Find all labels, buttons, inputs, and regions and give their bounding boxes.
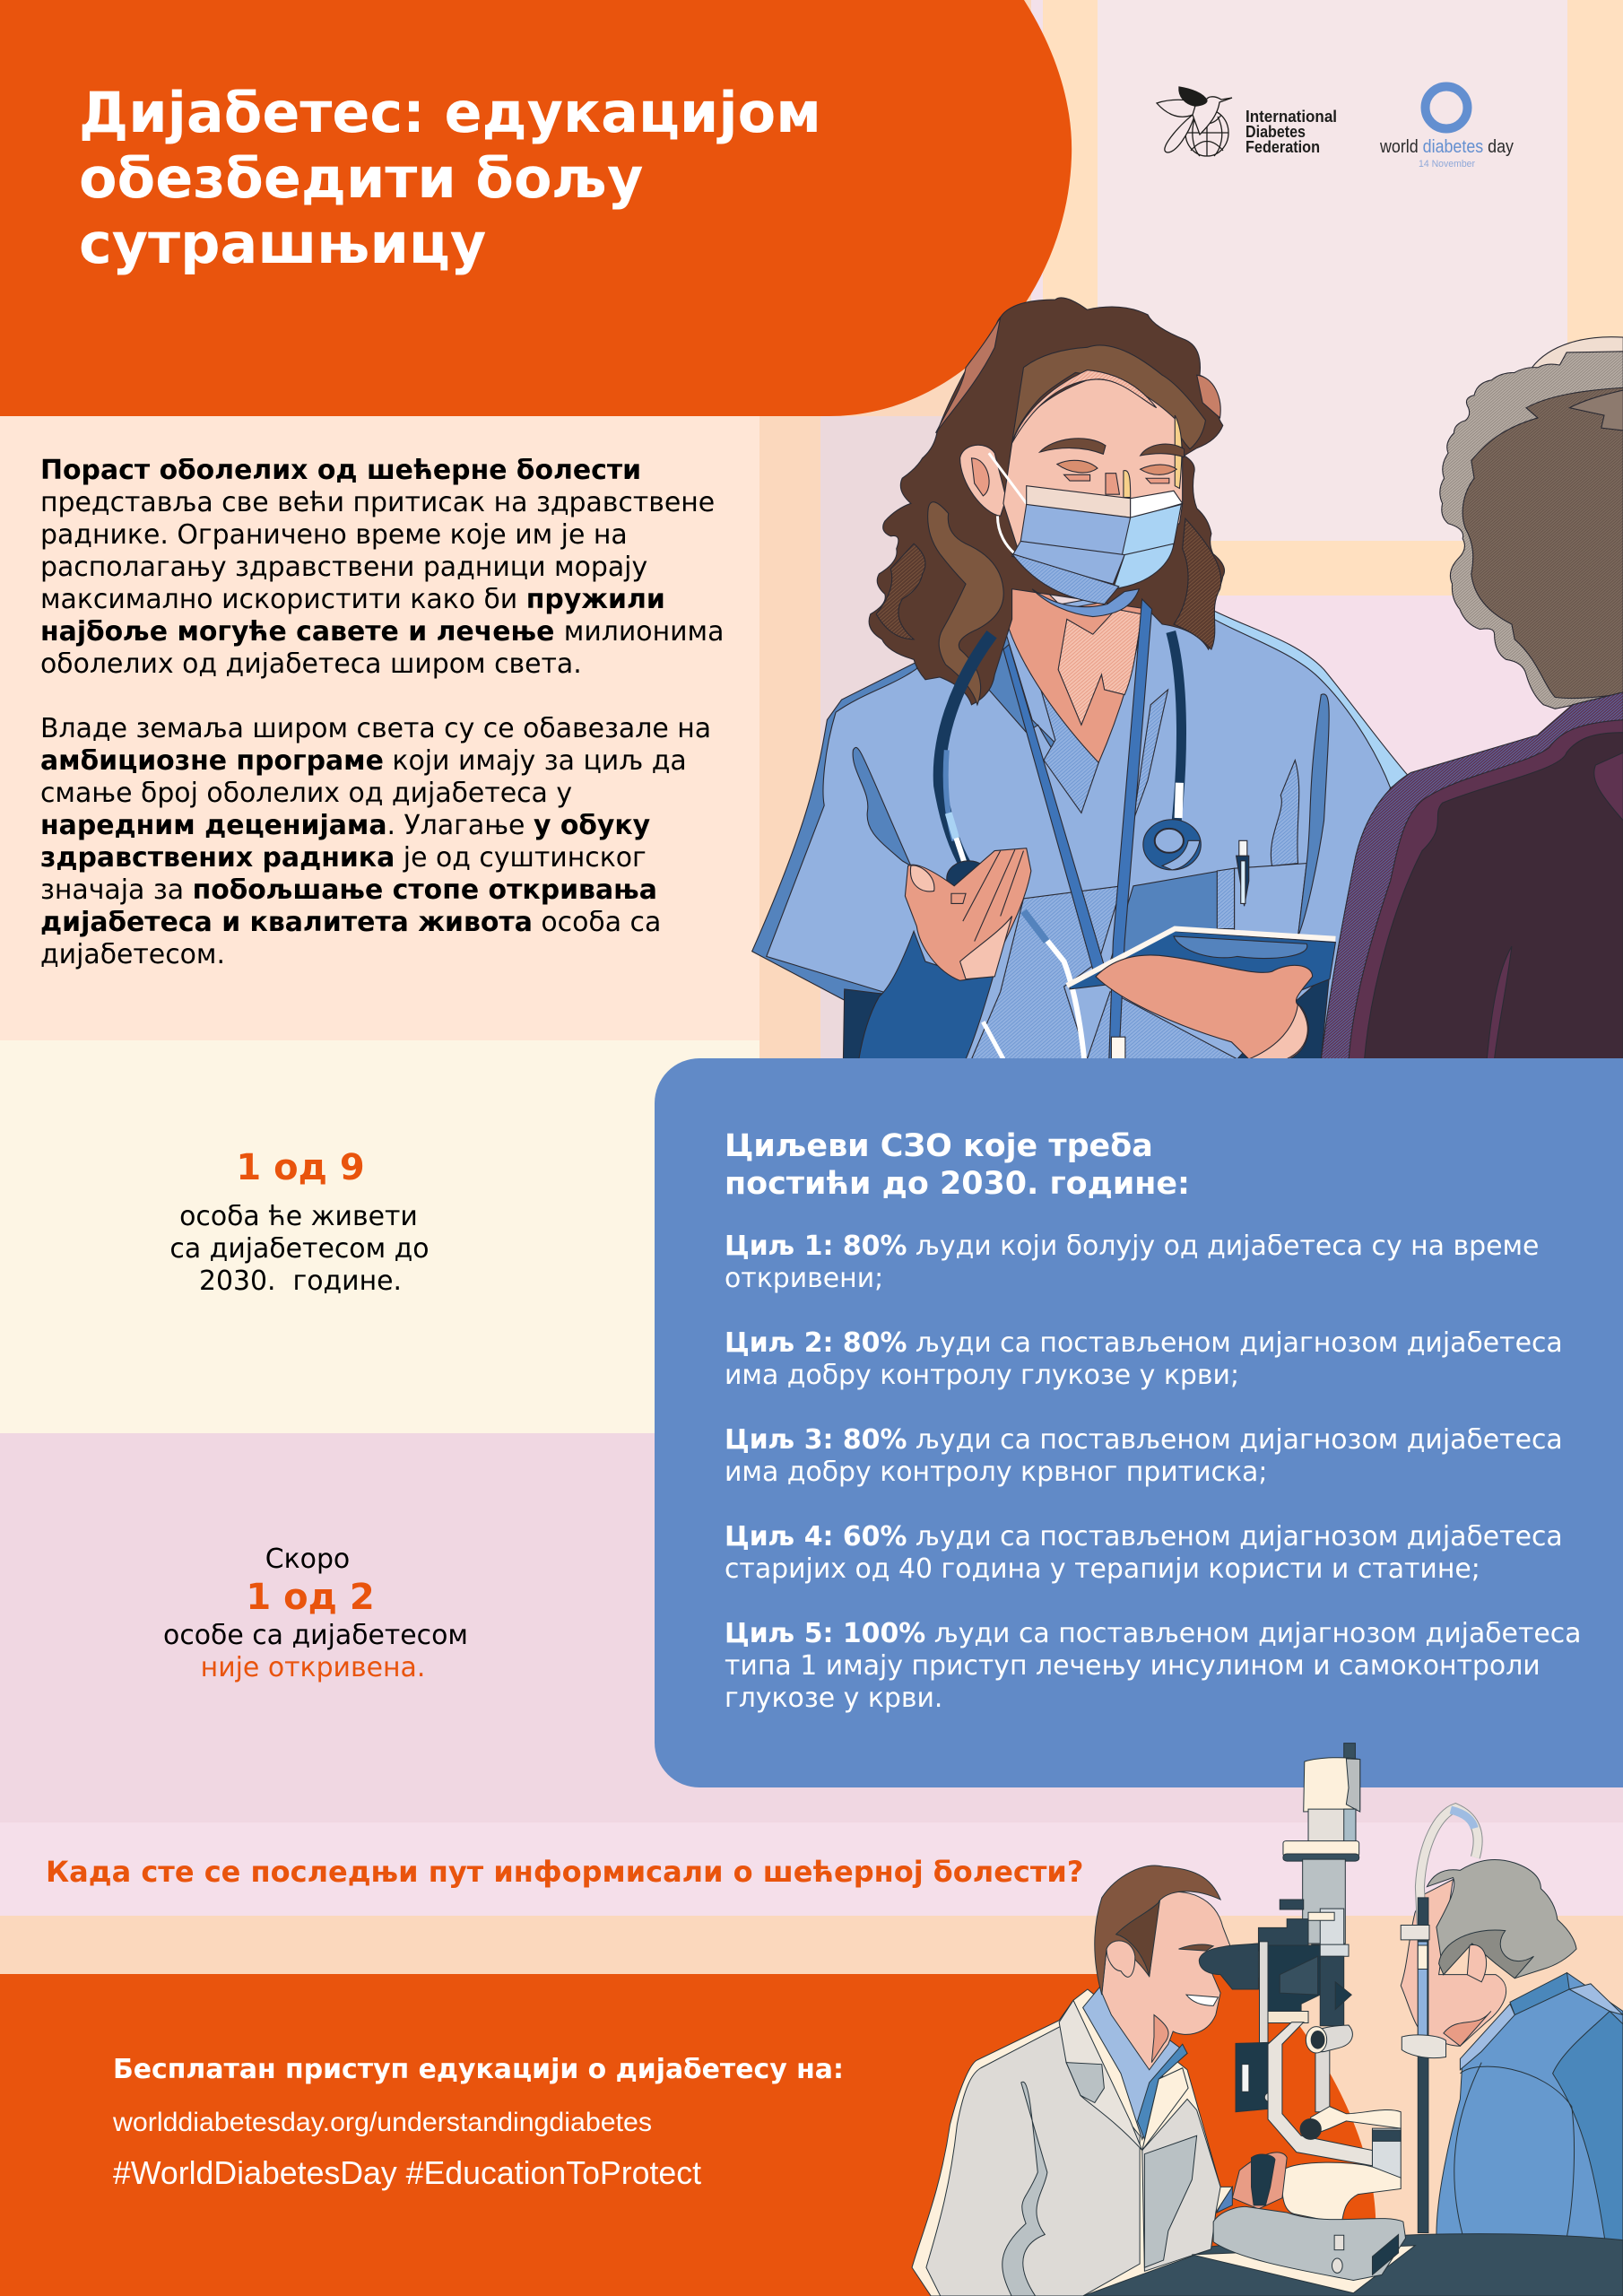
table — [1083, 2234, 1623, 2296]
doctor hair shade — [1116, 1901, 1159, 1977]
right hand light — [1249, 1004, 1307, 1059]
lamp body — [1268, 1945, 1320, 2011]
headrest pole — [1418, 1898, 1428, 2232]
neck shadow hatch — [1058, 609, 1142, 725]
box window — [1242, 2065, 1249, 2092]
base lug — [1332, 2258, 1342, 2273]
logo wordmark: Federation — [1245, 138, 1320, 156]
goal 5: типа 1 имају приступ лечењу инсулином и самоконтроли — [725, 1650, 1541, 1682]
base dark facet — [1372, 2234, 1399, 2274]
coat lapel shade — [1066, 2063, 1104, 2103]
jacket seam — [1454, 2063, 1575, 2237]
stat description: особа ће живети — [179, 1201, 418, 1232]
box stripe — [1372, 2130, 1401, 2141]
dark tab — [1280, 1900, 1304, 1909]
illustration: eye examination — [912, 1744, 1623, 2296]
doctor head — [1102, 1892, 1230, 2070]
pocket crease — [1298, 694, 1329, 936]
footer hashtags: #WorldDiabetesDay #EducationToProtect — [113, 2154, 701, 2191]
title: обезбедити бољу — [79, 145, 643, 211]
intro text: дијабетесом. — [40, 939, 225, 970]
hair copper edge right — [1197, 375, 1220, 418]
nose highlight — [1124, 471, 1131, 498]
inner ear — [971, 458, 989, 496]
tablet edge — [1067, 929, 1335, 986]
patient neck shadow — [1444, 2011, 1491, 2046]
right bracket — [1311, 2107, 1401, 2135]
WHO goals list — [725, 1231, 1582, 1714]
nurse left sleeve shade — [752, 662, 920, 1002]
nurse ear — [960, 445, 1006, 516]
intro text: здравствених радника је од суштинског — [40, 842, 647, 874]
intro text: представља све већи притисак на здравствене — [40, 487, 715, 518]
stat description: са дијабетесом до — [169, 1233, 430, 1265]
patient coat outer — [1321, 692, 1623, 1059]
hair hatch left lock — [876, 544, 925, 639]
hair hatch right — [1174, 518, 1221, 649]
nose — [1106, 474, 1119, 494]
cuff — [1217, 2187, 1232, 2213]
nurse lower hatched panel — [971, 886, 1122, 1059]
panel: WHO goals — [655, 1058, 1623, 1787]
jacket collar — [1510, 1973, 1569, 2015]
patient coat crease — [1487, 752, 1623, 1059]
left hand light — [910, 865, 1012, 979]
hair highlight left lock — [928, 502, 1003, 705]
carriage — [1282, 2162, 1401, 2223]
goal 1: Циљ 1: 80% људи који болују од дијабетеса су на време — [725, 1231, 1539, 1262]
title: Дијабетес: едукацијом — [79, 80, 821, 145]
logo: world diabetes day — [1379, 86, 1514, 170]
doctor right panel — [1142, 2099, 1220, 2271]
nurse face — [1003, 379, 1183, 549]
nurse right sleeve dark — [1237, 971, 1330, 1059]
goal 5: Циљ 5: 100% људи са постављеном дијагнозом дијабетеса — [725, 1618, 1582, 1649]
lamp column — [1303, 1859, 1345, 1944]
nurse forearm navy — [843, 989, 885, 1059]
goal 3: има добру контролу крвног притиска; — [725, 1457, 1267, 1488]
eyepiece — [1199, 1944, 1258, 1989]
patient coat dark — [1365, 733, 1623, 1059]
intro text: располагању здравствени радници морају — [40, 552, 647, 583]
doctor coat body — [926, 2026, 1140, 2296]
coat shade — [1002, 2082, 1047, 2296]
panel: WHO goals heading: Циљеви СЗО које треба — [725, 1128, 1153, 1164]
panel: question band — [0, 1822, 1623, 1916]
lamp neck — [1308, 1809, 1356, 1843]
statistic: almost 1 in 2 — [163, 1544, 468, 1683]
patient ear — [1467, 1945, 1487, 1982]
back hair — [869, 298, 1225, 705]
coat lapel — [1059, 2000, 1142, 2151]
intro text: Владе земаља широм света су се обавезале на — [40, 713, 711, 744]
stat highlight: није откривена. — [201, 1652, 425, 1683]
stethoscope — [940, 631, 1201, 1059]
panel: WHO goals heading: постићи до 2030. године: — [725, 1166, 1190, 1202]
plate — [1192, 2246, 1415, 2293]
patient hair shade — [1439, 1930, 1533, 1979]
goal 4: Циљ 4: 60% људи са постављеном дијагнозом дијабетеса — [725, 1521, 1563, 1552]
face edge highlight — [1175, 415, 1182, 488]
headrest arc fill — [1419, 1808, 1478, 1942]
band above question — [681, 1776, 1623, 1822]
intro text: максимално искористити како би пружили — [40, 584, 665, 615]
nurse sleeve fold — [853, 747, 911, 865]
lower knob — [1300, 2118, 1321, 2139]
joystick — [1252, 2154, 1275, 2205]
right box — [1372, 2128, 1401, 2178]
lanyard — [1003, 599, 1152, 1059]
chin rest — [1402, 2035, 1446, 2058]
vertical rod — [1315, 2049, 1330, 2112]
doctor hand — [1232, 2152, 1287, 2209]
peach band — [0, 1916, 1623, 1974]
title: сутрашњицу — [79, 211, 486, 276]
black box — [1236, 2042, 1275, 2112]
coat cream lapel — [1142, 2068, 1188, 2151]
ear loop — [989, 453, 1027, 553]
right arm — [1320, 1956, 1344, 2026]
panel shade — [1144, 2135, 1197, 2267]
cream bracket — [1268, 2011, 1308, 2023]
eyes — [1057, 460, 1176, 474]
nurse neck — [1009, 553, 1148, 762]
goal 1: откривени; — [725, 1263, 883, 1294]
intro text: оболелих од дијабетеса широм света. — [40, 648, 582, 680]
logo: International Diabetes Federation — [1157, 87, 1341, 156]
intro text: смање број оболелих од дијабетеса у — [40, 778, 572, 809]
left hand fingers — [951, 849, 1023, 942]
nurse collar hatch right — [1133, 690, 1168, 821]
lamp top tip — [1344, 1744, 1355, 1759]
tablet — [1070, 931, 1335, 1002]
forehead clamp — [1401, 1926, 1429, 1940]
shirt placket — [1137, 2044, 1187, 2139]
intro text: значаја за побољшање стопе откривања — [40, 874, 657, 906]
goal 4: старијих од 40 година у терапији користи и статине; — [725, 1553, 1480, 1585]
nurse right hand — [1096, 955, 1313, 1059]
logo wordmark: International — [1245, 108, 1337, 126]
patient hair — [1427, 1860, 1576, 1979]
headrest blue strap — [1451, 1810, 1474, 1828]
goal 5: глукозе у крви. — [725, 1683, 942, 1714]
hair highlight top — [1012, 345, 1205, 449]
intro text: дијабетеса и квалитета живота особа са — [40, 907, 661, 938]
arm block — [1308, 1912, 1334, 1920]
nurse shoulder highlight — [1205, 606, 1408, 790]
forehead hatch — [1012, 370, 1157, 443]
logo date: 14 November — [1419, 159, 1475, 170]
goal 2: има добру контролу глукозе у крви; — [725, 1360, 1239, 1391]
wheel centre — [1311, 2031, 1324, 2048]
doctor brow — [1179, 1944, 1213, 1951]
intro text: Пораст оболелих од шећерне болести — [40, 455, 641, 486]
logo wordmark: world diabetes day: world diabetes day — [1379, 137, 1514, 157]
goal 2: Циљ 2: 80% људи са постављеном дијагнозом дијабетеса — [725, 1327, 1563, 1359]
neck shade — [1344, 1809, 1356, 1843]
dark steps — [1258, 1919, 1308, 1951]
doctor hair — [1095, 1866, 1220, 1995]
base knob — [1334, 2235, 1344, 2250]
curved arm — [1268, 2022, 1372, 2166]
box knob — [1264, 2092, 1278, 2102]
footer text — [112, 2054, 844, 2191]
lamp upper housing — [1304, 1758, 1360, 1812]
doctor neck shade — [1151, 2015, 1168, 2063]
footer url: worlddiabetesday.org/understandingdiabetes — [112, 2108, 652, 2137]
nurse scrubs — [767, 589, 1391, 1059]
jacket dark patch — [1553, 2011, 1623, 2242]
stat lead-in: Скоро — [265, 1544, 350, 1575]
doctor coat — [912, 1989, 1232, 2296]
intro text: амбициозне програме који имају за циљ да — [40, 745, 687, 777]
column light — [1320, 1909, 1344, 1945]
nurse left hand — [905, 848, 1031, 980]
housing shade — [1346, 1759, 1360, 1812]
shirt fold — [1271, 761, 1299, 865]
icon: blue circle — [1426, 86, 1467, 129]
wheel — [1306, 2025, 1352, 2052]
eyebrows — [1040, 439, 1185, 457]
jacket collar light — [1460, 1984, 1623, 2070]
panel: statistic two background — [0, 1433, 759, 1822]
patient hair — [1440, 337, 1623, 709]
patient jacket — [1436, 1973, 1623, 2242]
headrest arc — [1419, 1808, 1478, 1942]
nurse forearm — [859, 931, 997, 1059]
lamp pillar — [1259, 1942, 1268, 2046]
nurse pocket — [1235, 864, 1306, 936]
nurse pocket side — [1217, 868, 1235, 929]
slit lamp — [1192, 1744, 1415, 2293]
illustration: nurse and patient — [752, 298, 1623, 1059]
pen — [1237, 840, 1249, 906]
objective highlight — [1280, 1956, 1318, 1995]
nurse chest shade — [989, 634, 1070, 759]
intro text: наредним деценијама. Улагање у обуку — [40, 810, 650, 841]
statistic: 1 in 9 — [169, 1147, 430, 1297]
nurse collar hatch — [1041, 690, 1098, 813]
pole cream — [1418, 1945, 1428, 1970]
goal 3: Циљ 3: 80% људи са постављеном дијагнозом дијабетеса — [725, 1424, 1563, 1456]
pole light — [1418, 1942, 1428, 2037]
nurse lower hatched panel right — [1087, 992, 1237, 1059]
icon: hummingbird and globe — [1157, 87, 1232, 156]
panel: statistic one background — [0, 1040, 759, 1433]
right arm notch — [1335, 1982, 1351, 2009]
intro text: раднике. Ограничено време које им је на — [40, 519, 628, 551]
tablet light patch — [1174, 936, 1307, 959]
stat number: 1 од 9 — [236, 1147, 365, 1188]
panel: intro side strip — [759, 416, 820, 1058]
stat number: 1 од 2 — [246, 1577, 375, 1618]
question text: Када сте се последњи пут информисали о шећерној болести? — [46, 1855, 1083, 1889]
collar strip — [1312, 1944, 1349, 1956]
title banner — [0, 0, 1072, 416]
doctor shirt — [1083, 1987, 1187, 2139]
patient face — [1401, 1880, 1506, 2046]
collar underside — [1283, 1854, 1359, 1861]
mask — [1012, 486, 1183, 617]
patient coat mid — [1349, 720, 1623, 1059]
nurse pocket band dark — [1110, 871, 1220, 961]
hair copper edge left — [936, 317, 1001, 433]
footer heading: Бесплатан приступ едукацији о дијабетесу на: — [113, 2054, 844, 2085]
footer circle behind slit lamp — [1076, 1974, 1376, 2296]
stat description: 2030. године. — [199, 1265, 402, 1297]
logo wordmark: Diabetes — [1245, 123, 1306, 141]
stat description: особе са дијабетесом — [163, 1620, 468, 1651]
doctor mouth — [1186, 1995, 1218, 2005]
under-eye marks — [1064, 474, 1169, 483]
doctor ear — [1107, 1941, 1135, 1977]
wheel ring — [1306, 2027, 1327, 2053]
panel: footer orange — [0, 1974, 1103, 2296]
panel: intro text background — [0, 416, 759, 1040]
lamp collar — [1283, 1841, 1359, 1857]
base — [1213, 2206, 1406, 2281]
intro text: најбоље могуће савете и лечење милионима — [40, 616, 724, 648]
